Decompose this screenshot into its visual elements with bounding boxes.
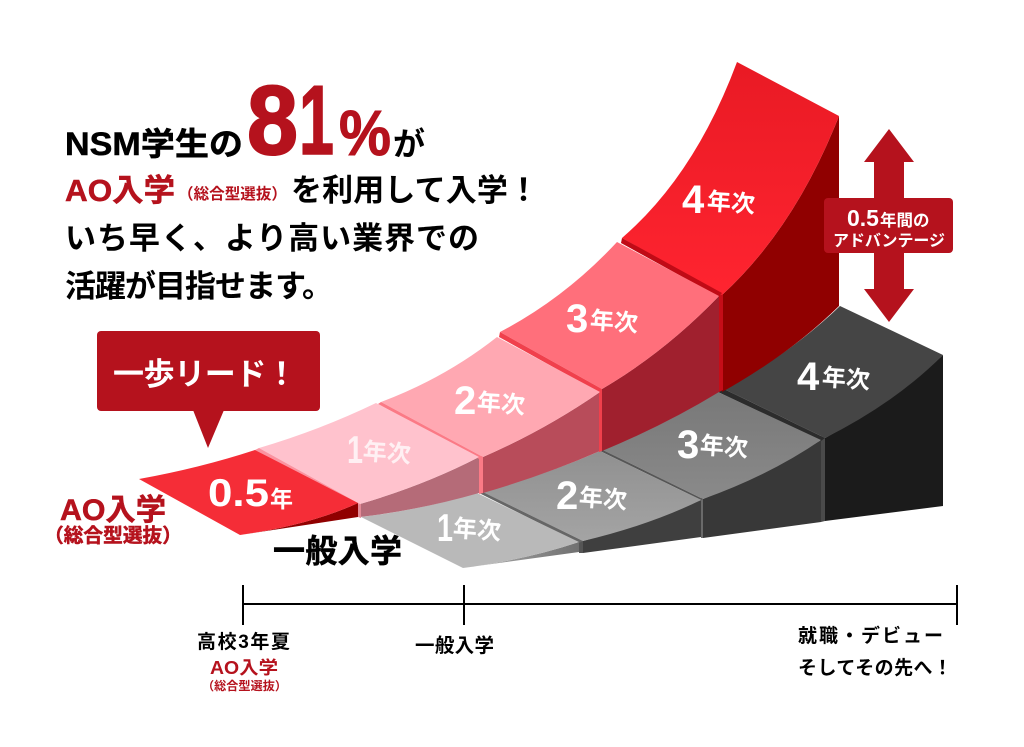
- grey step side 2: [583, 500, 701, 553]
- headline: AO入学: [65, 173, 175, 208]
- headline: [65, 65, 539, 304]
- headline: 8: [247, 65, 298, 175]
- label year 3 red: [566, 297, 639, 341]
- label year 2 red: [454, 379, 526, 423]
- grey step 4 top: [724, 306, 943, 438]
- staircase: AO admission (red): [139, 62, 839, 535]
- grey step side 4: [825, 355, 943, 521]
- red step side 4: [722, 116, 839, 392]
- red step 2 top: [381, 337, 600, 457]
- label year 4 red: 4: [682, 178, 705, 222]
- grey step side 3: [703, 440, 821, 538]
- red step side 3: [602, 296, 719, 451]
- label: AO admission: （総合型選抜）: [44, 525, 182, 547]
- label: AO admission: AO入学: [60, 494, 166, 527]
- red step side 2: [483, 392, 600, 493]
- timeline axis: [243, 585, 957, 625]
- label year 4 grey: 4: [797, 355, 820, 399]
- headline: %: [339, 97, 391, 169]
- label year 3 red: 3: [566, 297, 588, 341]
- label year 2 red: 年次: [476, 389, 526, 420]
- grey step 1 wedge: [463, 542, 579, 568]
- grey step 4 front edge: [718, 389, 825, 441]
- red step half front edge: [255, 448, 360, 505]
- timeline label: high school year 3 summer: AO入学: [210, 657, 278, 678]
- label year 3 red: 年次: [589, 307, 639, 338]
- step labels: red: [208, 178, 756, 515]
- red step 1 top: [259, 403, 479, 504]
- grey side separators: [579, 436, 825, 553]
- label year 1 red: 1: [347, 429, 363, 472]
- red step 3 front edge: [499, 332, 602, 393]
- grey step 2 front edge: [479, 492, 583, 543]
- staircase: general admission (grey): [361, 306, 943, 568]
- timeline label: general admission: 一般入学: [415, 634, 494, 657]
- label year 1 grey: [437, 507, 502, 550]
- label year 3 grey: 3: [677, 423, 699, 467]
- label year 1 grey: 1: [437, 507, 453, 550]
- double arrow: half-year advantage: 年間の: [880, 210, 930, 230]
- label year 2 red: 2: [454, 379, 476, 423]
- label year 4 red: [682, 178, 756, 222]
- double arrow: half-year advantage: [824, 129, 953, 322]
- grey step 2 top: [483, 451, 701, 541]
- timeline label: career debut: そしてその先へ！: [798, 657, 952, 679]
- headline: が: [393, 126, 425, 162]
- label year 1 red: 年次: [362, 438, 412, 469]
- label year 2 grey: 年次: [578, 484, 628, 515]
- label 0.5 year: 年: [270, 486, 293, 512]
- red step half wedge: [240, 503, 358, 535]
- step labels: grey: [437, 355, 871, 550]
- red step 4 top: [622, 62, 839, 295]
- label 0.5 year: [208, 472, 293, 515]
- double arrow: half-year advantage: アドバンテージ: [833, 233, 945, 250]
- timeline label: high school year 3 summer: 高校3年夏: [197, 630, 290, 653]
- headline: を利用して入学！: [291, 173, 539, 208]
- label year 4 grey: 年次: [821, 364, 871, 395]
- double arrow: half-year advantage: 0.5: [847, 205, 879, 231]
- callout: one step ahead: [97, 331, 320, 448]
- grey step 3 front edge: [600, 450, 703, 500]
- timeline label: high school year 3 summer: （総合型選抜）: [202, 678, 287, 693]
- red step 2 front edge: [378, 402, 483, 459]
- headline: 活躍が目指せます。: [65, 269, 333, 304]
- label year 4 grey: [797, 355, 871, 399]
- label year 2 grey: 2: [556, 474, 578, 518]
- headline: NSM学生の: [65, 126, 243, 162]
- red step 4 front edge: [621, 238, 722, 297]
- label year 3 grey: 年次: [699, 432, 749, 463]
- label year 3 grey: [677, 423, 749, 467]
- red step 3 top: [500, 242, 719, 389]
- label: general admission: 一般入学: [273, 533, 402, 569]
- headline: 1: [299, 65, 334, 175]
- label: AO admission: [44, 494, 182, 547]
- timeline label: high school year 3 summer: [197, 630, 290, 693]
- label year 4 red: 年次: [706, 188, 756, 219]
- red step side 1: [360, 457, 479, 517]
- timeline label: career debut: 就職・デビュー: [798, 624, 943, 647]
- red step half top: [139, 450, 358, 535]
- label year 1 red: [347, 429, 412, 472]
- headline: （総合型選抜）: [178, 185, 287, 203]
- label year 1 grey: 年次: [452, 515, 502, 546]
- grey step 1 top: [361, 493, 579, 568]
- grey step 3 top: [603, 392, 821, 499]
- label 0.5 year: 0.5: [208, 472, 269, 515]
- headline: いち早く、より高い業界での: [65, 221, 479, 256]
- label year 2 grey: [556, 474, 628, 518]
- red side separators: [358, 293, 723, 518]
- callout: one step ahead: 一歩リード！: [113, 357, 297, 392]
- timeline label: career debut: [798, 624, 952, 679]
